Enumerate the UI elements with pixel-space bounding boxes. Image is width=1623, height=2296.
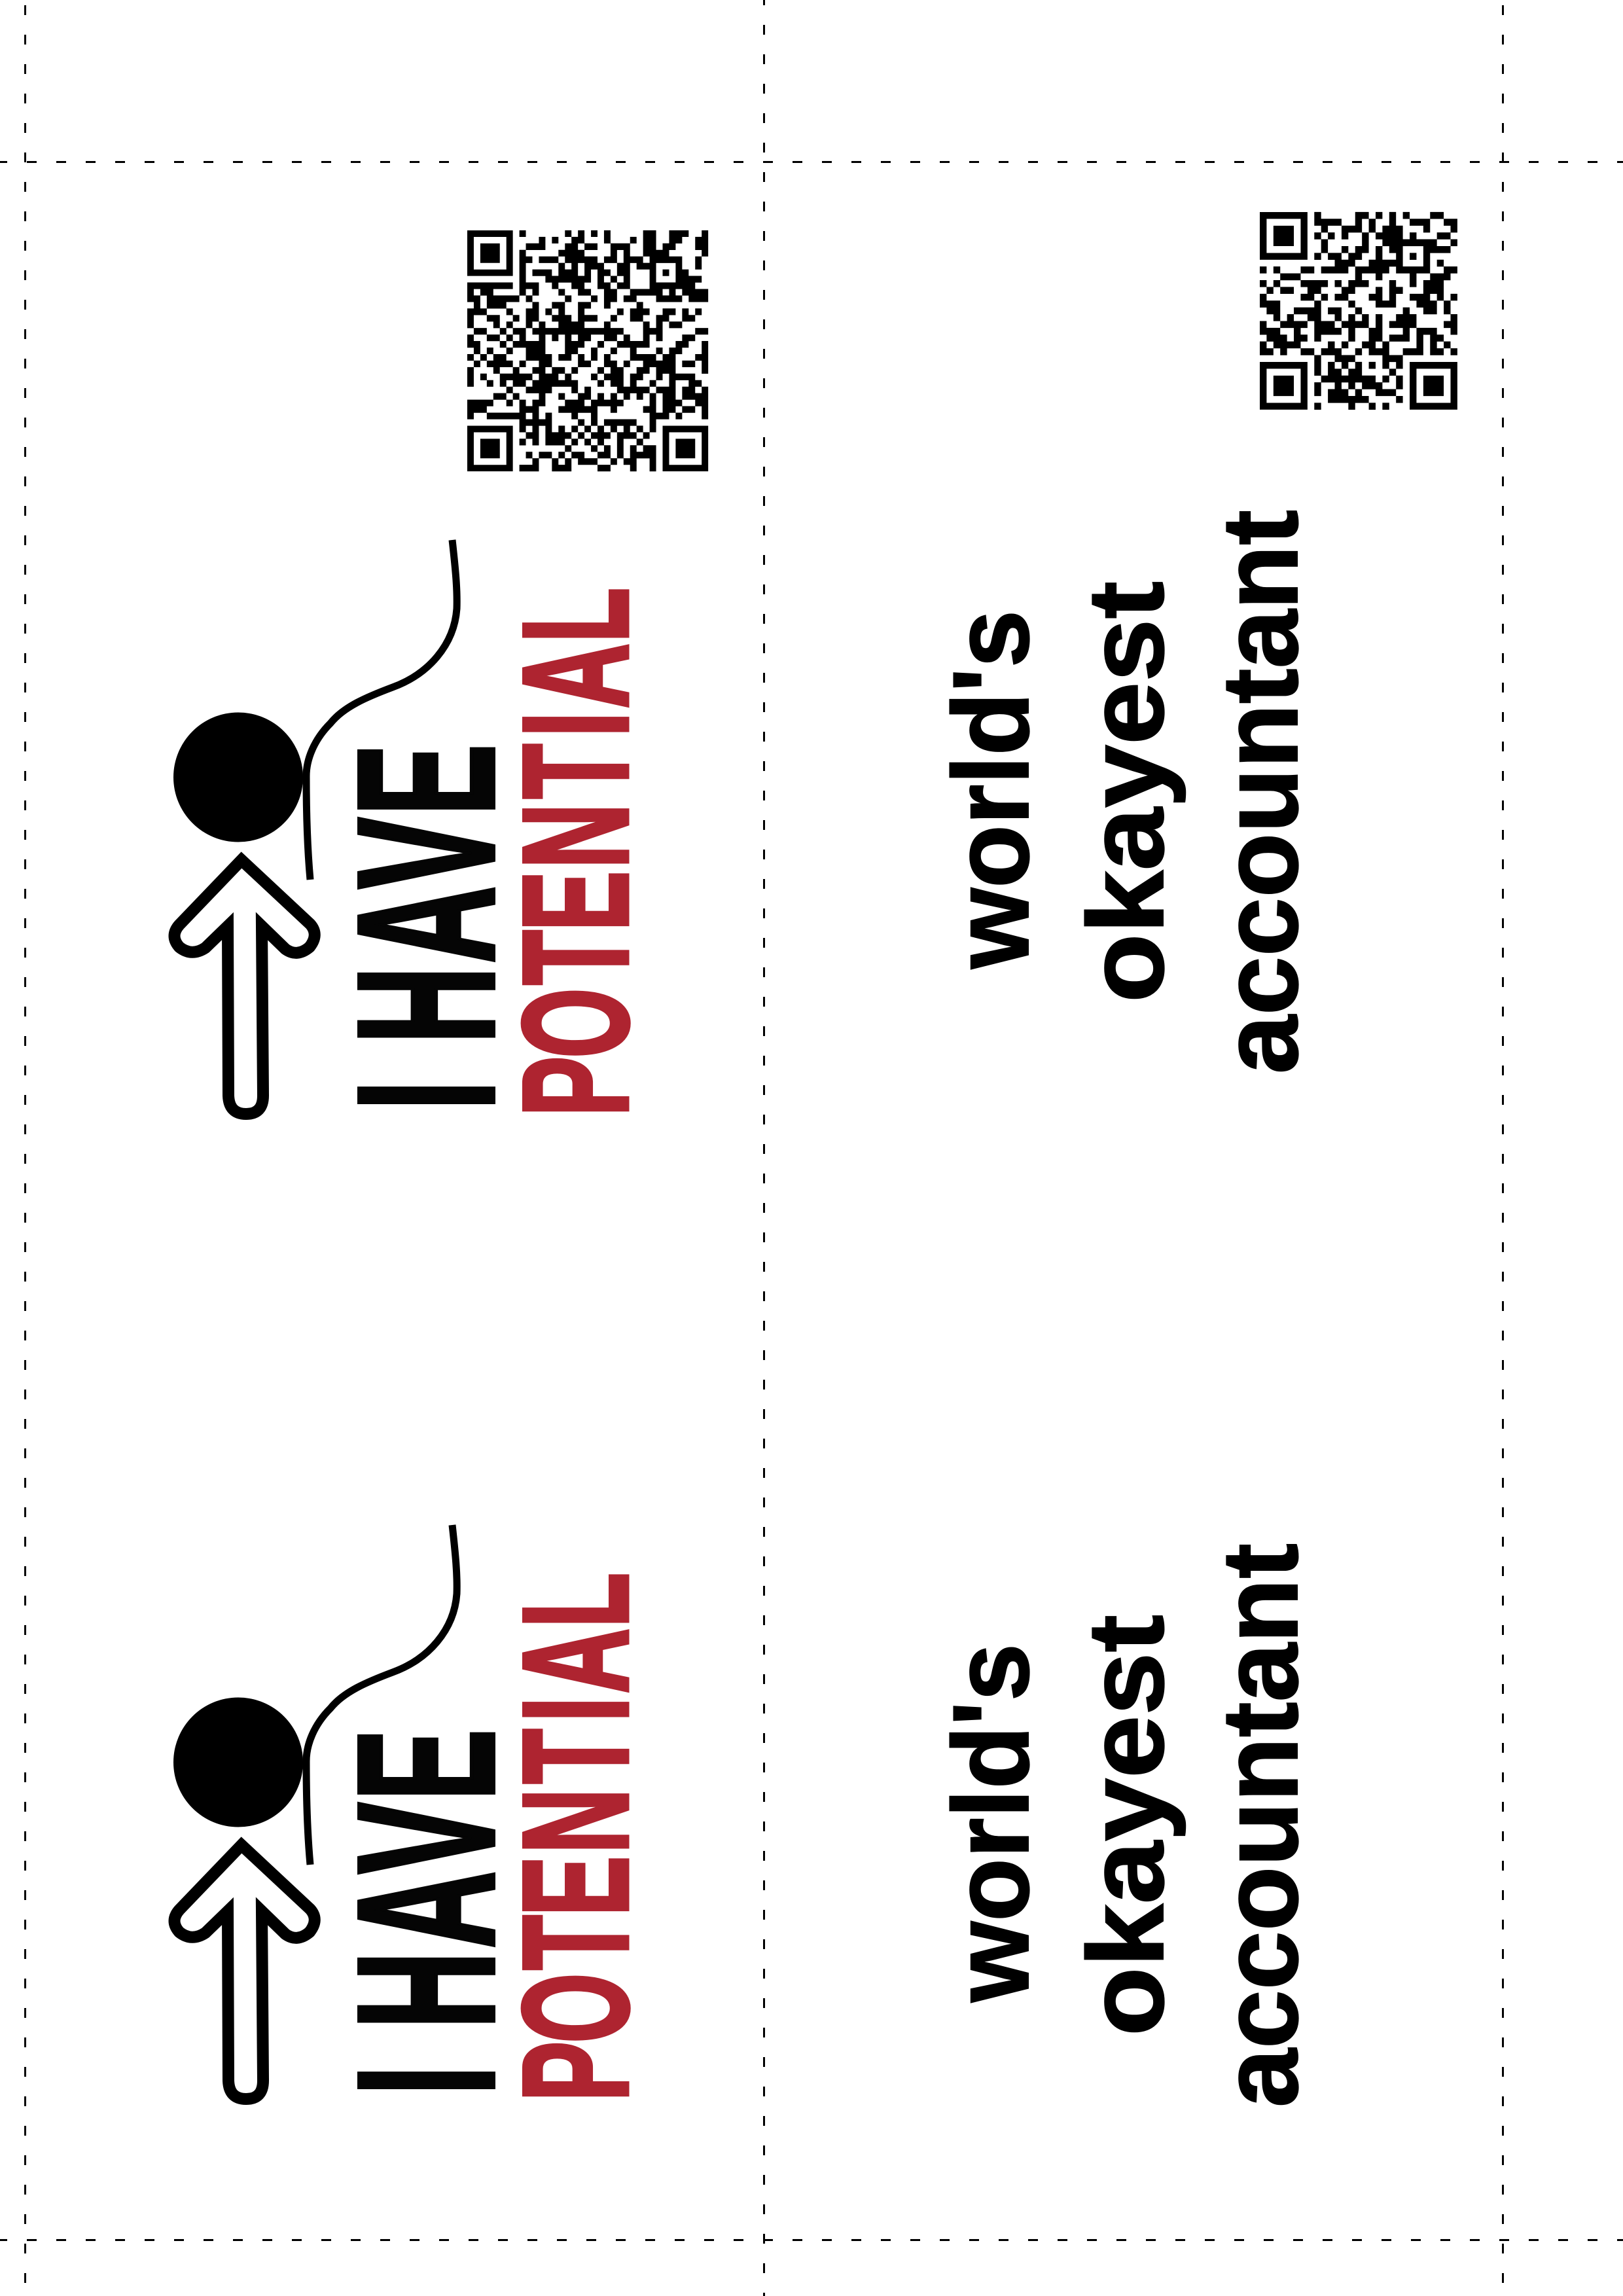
- slogan: world's okayest accountant, top card: [931, 510, 1320, 1074]
- logo: I have potential, top card: [173, 540, 660, 1117]
- icon: stick figure head: [173, 712, 303, 842]
- text line: accountant: accountant: [1200, 1543, 1320, 2108]
- text line: world's: world's: [931, 610, 1051, 969]
- QR code: top right card: [1260, 212, 1457, 410]
- text line: world's: world's: [931, 1643, 1051, 2003]
- heading: I HAVE: I HAVE: [317, 744, 535, 1110]
- text line: okayest: okayest: [1065, 1615, 1186, 2036]
- text line: accountant: accountant: [1200, 510, 1320, 1074]
- slogan: world's okayest accountant, bottom card: [931, 1543, 1320, 2108]
- heading: I HAVE: I HAVE: [317, 1729, 535, 2095]
- icon: curved body line: [306, 540, 457, 880]
- logo: I have potential, bottom card: [173, 1525, 660, 2102]
- icon: upward arrow: [174, 860, 315, 1114]
- icon: upward arrow: [174, 1845, 315, 2099]
- icon: curved body line: [306, 1525, 457, 1865]
- text line: okayest: okayest: [1065, 581, 1186, 1003]
- heading: POTENTIAL: POTENTIAL: [492, 588, 660, 1117]
- icon: stick figure head: [173, 1698, 303, 1827]
- QR code: top left card: [467, 230, 708, 471]
- heading: POTENTIAL: POTENTIAL: [492, 1573, 660, 2102]
